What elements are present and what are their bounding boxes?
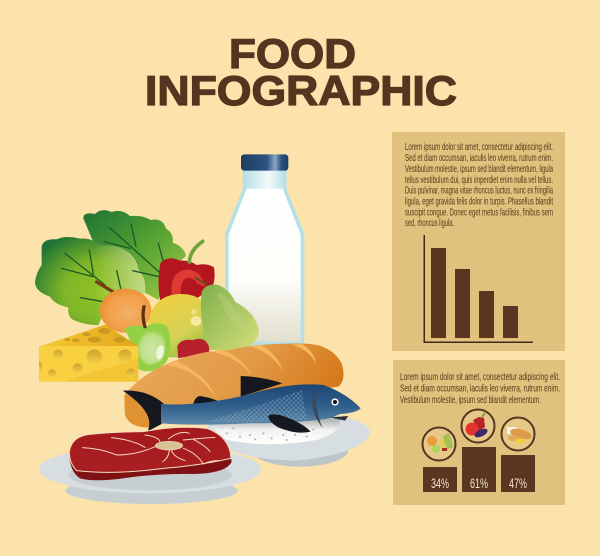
text block: bottom paragraph: [400, 372, 560, 406]
bar: 47%: 47%: [509, 475, 527, 491]
bar: 34%: [423, 467, 457, 492]
red bell pepper: [158, 241, 215, 300]
bar: 47%: [501, 455, 535, 492]
leafy greens: [35, 210, 186, 325]
bar: 34%: 34%: [431, 475, 449, 491]
green pear: [195, 277, 259, 350]
bread loaf: [124, 344, 344, 427]
fish plate: [207, 415, 370, 467]
title: FOOD: [229, 30, 356, 77]
title: [145, 30, 457, 114]
yellow pear: [148, 294, 212, 357]
red fruit: [177, 339, 209, 358]
bar chart: [424, 235, 533, 343]
fish: [123, 376, 361, 433]
bar: 61%: [462, 447, 496, 492]
icon: fruit: [422, 428, 456, 460]
icon: bread and cheese: [502, 418, 534, 450]
title: INFOGRAPHIC: [145, 67, 457, 114]
green apple: [124, 307, 171, 371]
illustration: food group: [35, 154, 370, 504]
text block: top paragraph: sed, rhoncus ligula.: [405, 218, 454, 229]
cheese wedge: [39, 325, 138, 382]
peach: [100, 289, 151, 333]
steak: [69, 427, 232, 480]
text block: top paragraph: [405, 142, 553, 229]
bar: 61%: 61%: [470, 475, 488, 491]
icon: vegetables: [462, 410, 494, 442]
panel: text and bar chart: [392, 132, 565, 351]
panel: text and percentages: [393, 360, 565, 505]
steak plate: [39, 445, 261, 504]
milk bottle: [225, 154, 304, 347]
